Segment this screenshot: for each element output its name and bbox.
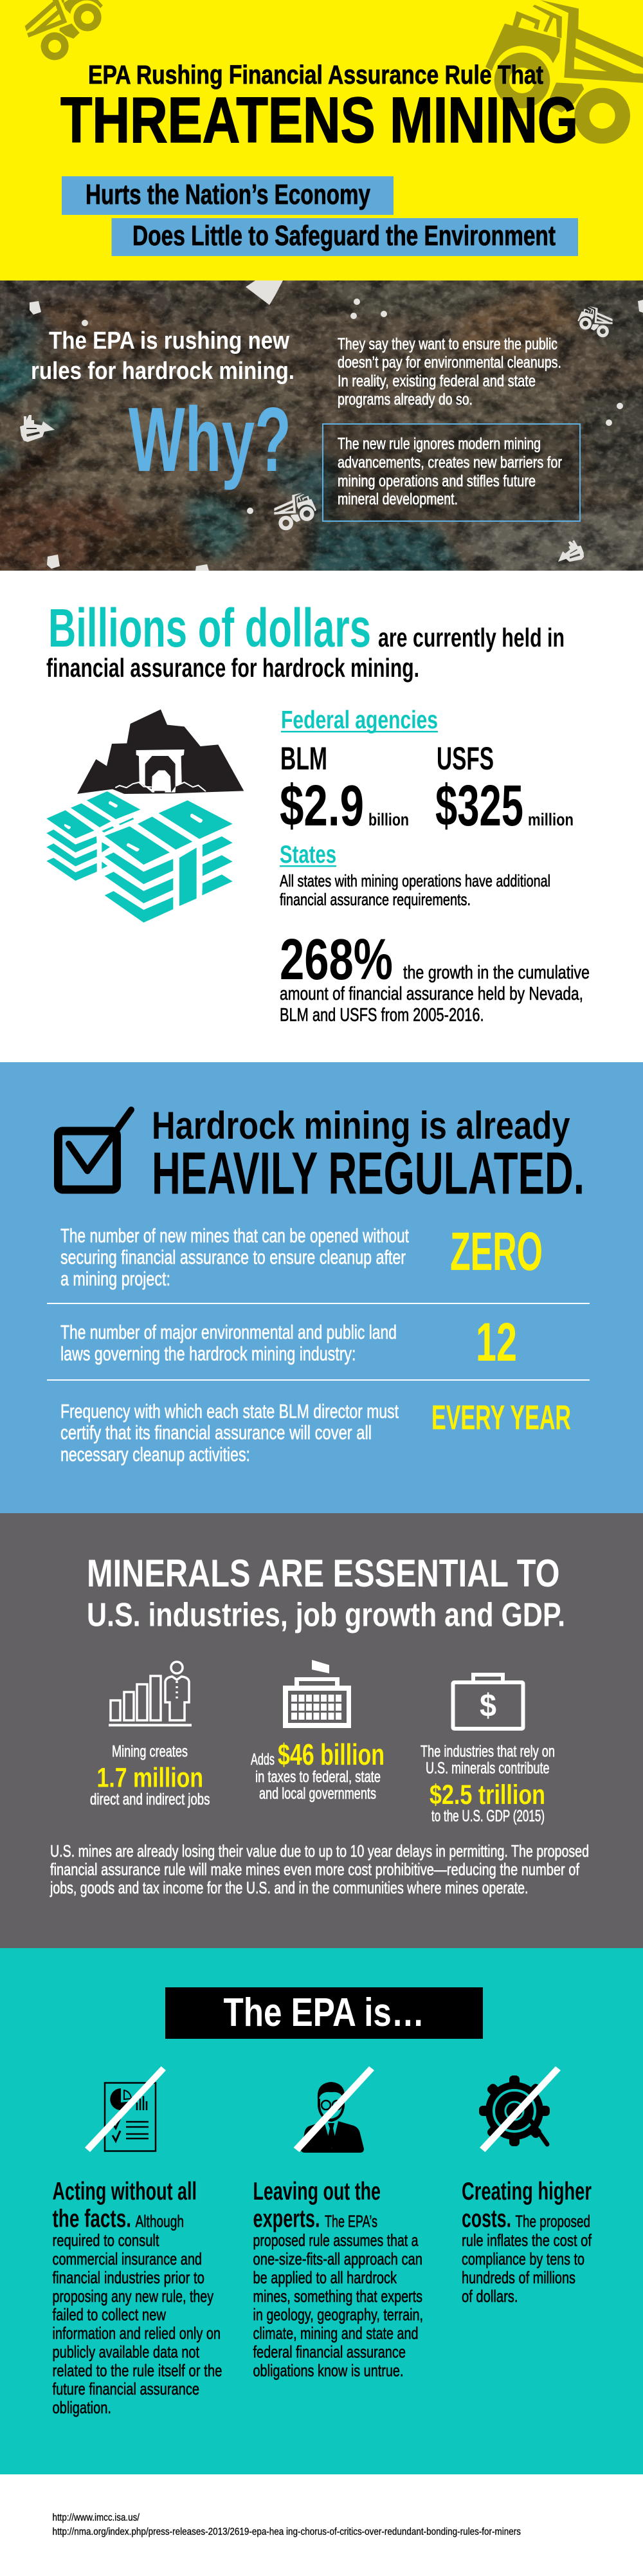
panel: minerals are essential [0, 1513, 643, 1948]
heading: the EPA is rushing: The EPA is rushing new [49, 327, 289, 354]
stat: GDP: $2.5 trillion [430, 1780, 545, 1810]
stat: jobs: Mining creates [112, 1742, 188, 1760]
column: leaving out the experts [253, 2178, 423, 2380]
stat: GDP: U.S. minerals contribute [426, 1759, 549, 1777]
states text [280, 871, 550, 909]
panel: billions of dollars [0, 571, 643, 1062]
panel: why, rock photo background [0, 270, 643, 579]
stat: taxes: in taxes to federal, state [255, 1768, 381, 1786]
column: acting without all the facts: obligation. [53, 2398, 111, 2417]
column: creating higher costs [462, 2178, 592, 2306]
column: acting without all the facts: the facts. [53, 2205, 131, 2232]
stat: taxes: Adds [251, 1751, 275, 1769]
panel: source references [0, 2474, 643, 2576]
icon: bars and worker [109, 1662, 192, 1727]
heading: heavily regulated: Hardrock mining is already [152, 1104, 570, 1147]
fact row: every year: Frequency with which each state BLM director must [60, 1400, 399, 1422]
icon: briefcase with dollar: $ [480, 1688, 496, 1724]
icon: dump truck top right [485, 0, 643, 143]
panel: source references: http://www.imcc.isa.us/ [53, 2512, 140, 2523]
fact row: twelve: The number of major environmental and public land [60, 1321, 397, 1343]
column: acting without all the facts: Although [135, 2212, 184, 2231]
fact row: twelve: 12 [476, 1312, 517, 1372]
callout box: new rule: The new rule ignores modern mining [338, 435, 541, 453]
heading: the EPA is rushing [31, 327, 294, 385]
heading: billions of dollars: are currently held in [378, 623, 565, 652]
icon: briefcase with dollar [453, 1675, 523, 1729]
callout: hurts economy: Hurts the Nation’s Economy [86, 179, 370, 210]
callout box: new rule: advancements, creates new barriers for [338, 454, 562, 472]
title: EPA Rushing Financial Assurance Rule That [88, 60, 543, 89]
column: leaving out the experts: be applied to all hardrock [253, 2268, 397, 2287]
text block: public cleanups: In reality, existing federal and state [338, 372, 536, 390]
text block: public cleanups: programs already do so. [338, 391, 473, 409]
column: acting without all the facts: commercial insurance and [53, 2249, 202, 2268]
column: acting without all the facts: publicly available data not [53, 2342, 200, 2361]
fact row: every year: certify that its financial assurance will cover all [60, 1421, 372, 1444]
big word: why: Why? [129, 389, 291, 491]
callout: hurts economy [62, 176, 394, 215]
stat: GDP: to the U.S. GDP (2015) [431, 1807, 545, 1825]
heading: billions of dollars [46, 598, 565, 683]
stat: GDP: The industries that rely on [421, 1742, 555, 1760]
column: acting without all the facts: information and relied only on [53, 2324, 221, 2343]
column: leaving out the experts: federal financial assurance [253, 2342, 406, 2361]
stat: GDP [421, 1742, 555, 1825]
states text: All states with mining operations have additional [280, 871, 550, 890]
fact row: twelve [60, 1312, 517, 1372]
heading: billions of dollars: Billions of dollars [48, 598, 371, 658]
states text: financial assurance requirements. [280, 890, 471, 909]
callout box: new rule: mining operations and stifles future [338, 472, 536, 490]
icon: checkbox [58, 1110, 131, 1190]
stat: jobs: direct and indirect jobs [90, 1790, 210, 1808]
text block: public cleanups [338, 335, 561, 409]
column: acting without all the facts: required to consult [53, 2231, 159, 2250]
column: acting without all the facts: related to the rule itself or the [53, 2361, 222, 2380]
column: leaving out the experts: Leaving out the [253, 2178, 381, 2205]
stat: jobs [90, 1742, 210, 1808]
column: leaving out the experts: one-size-fits-all approach can [253, 2249, 422, 2268]
panel: yellow header [0, 0, 643, 281]
text block: permitting delays [50, 1841, 589, 1897]
column: creating higher costs: compliance by tens to [462, 2249, 584, 2268]
text block: public cleanups: They say they want to ensure the public [338, 335, 557, 353]
column: creating higher costs: hundreds of millions [462, 2268, 575, 2287]
stat: BLM [280, 741, 409, 838]
heading: minerals [87, 1552, 565, 1634]
icon: crossed-out expert [294, 2066, 374, 2153]
heading: heavily regulated [152, 1104, 584, 1207]
stat: USFS [435, 741, 574, 838]
column: leaving out the experts: proposed rule assumes that a [253, 2231, 419, 2250]
heading: the EPA is rushing: rules for hardrock mining. [31, 358, 294, 385]
icon: crossed-out gear [479, 2066, 561, 2152]
column: creating higher costs: rule inflates the cost of [462, 2231, 592, 2250]
column: acting without all the facts [53, 2178, 222, 2417]
panel: the EPA is [0, 1948, 643, 2474]
icon: dump truck top left [16, 0, 114, 66]
column: acting without all the facts: future financial assurance [53, 2379, 199, 2398]
column: acting without all the facts: Acting without all [53, 2178, 197, 2205]
stat: 268 percent growth: BLM and USFS from 2005-2016. [280, 1005, 484, 1026]
fact row: zero: ZERO [450, 1221, 543, 1282]
stat: taxes [251, 1738, 385, 1803]
column: acting without all the facts: failed to collect new [53, 2305, 166, 2324]
text block: public cleanups: doesn’t pay for environmental cleanups. [338, 354, 561, 372]
fact row: zero: securing financial assurance to ensure cleanup after [60, 1246, 406, 1269]
fact row: every year: necessary cleanup activities: [60, 1443, 250, 1466]
stat: BLM: billion [368, 810, 409, 829]
heading: billions of dollars: financial assurance for hardrock mining. [46, 653, 419, 683]
stat: BLM: $2.9 [280, 774, 364, 838]
column: leaving out the experts: obligations know is untrue. [253, 2361, 404, 2380]
stat: 268 percent growth: the growth in the cumulative [403, 962, 590, 983]
fact row: zero [60, 1221, 543, 1290]
icon: crossed-out report [85, 2066, 166, 2152]
states heading: States [280, 841, 336, 869]
column: leaving out the experts: climate, mining and state and [253, 2324, 418, 2343]
column: creating higher costs: costs. [462, 2205, 511, 2232]
fact row: zero: The number of new mines that can be opened without [60, 1224, 409, 1247]
column: leaving out the experts: experts. [253, 2205, 320, 2232]
stat: taxes: $46 billion [278, 1738, 385, 1771]
panel: source references: http://nma.org/index.php/press-releases-2013/2619-epa-hea ing-chorus-of-critics-over-redundant-bonding-rules-for-miners [53, 2526, 521, 2537]
stat: USFS: $325 [435, 774, 523, 838]
heading: the EPA is: The EPA is… [224, 1991, 424, 2035]
decorative icons on rock [20, 281, 643, 571]
column: leaving out the experts: The EPA’s [325, 2212, 377, 2231]
stat: BLM: BLM [280, 741, 327, 777]
callout box: new rule: mineral development. [338, 490, 458, 508]
stat: USFS: million [528, 810, 574, 829]
column: acting without all the facts: financial industries prior to [53, 2268, 204, 2287]
column: leaving out the experts: in geology, geography, terrain, [253, 2305, 423, 2324]
stat: USFS: USFS [437, 741, 494, 777]
fact row: zero: a mining project: [60, 1267, 170, 1290]
column: creating higher costs: Creating higher [462, 2178, 592, 2205]
fact row: every year [60, 1399, 571, 1466]
icon: government building [283, 1660, 351, 1728]
column: leaving out the experts: mines, something that experts [253, 2286, 422, 2306]
column: creating higher costs: The proposed [516, 2212, 590, 2231]
column: creating higher costs: of dollars. [462, 2286, 518, 2306]
callout box: new rule [323, 424, 580, 521]
stat: jobs: 1.7 million [96, 1763, 203, 1794]
title [60, 60, 578, 156]
fact row: twelve: laws governing the hardrock mining industry: [60, 1342, 356, 1365]
stat: 268 percent growth: 268% [280, 928, 393, 992]
column: acting without all the facts: proposing any new rule, they [53, 2286, 213, 2306]
heading: the EPA is [165, 1987, 483, 2039]
panel: heavily regulated [0, 1062, 643, 1513]
icon: mine and money stacks [46, 710, 244, 923]
federal agencies heading: Federal agencies [281, 706, 438, 734]
stat: taxes: and local governments [259, 1785, 376, 1803]
stat: 268 percent growth [280, 928, 590, 1026]
